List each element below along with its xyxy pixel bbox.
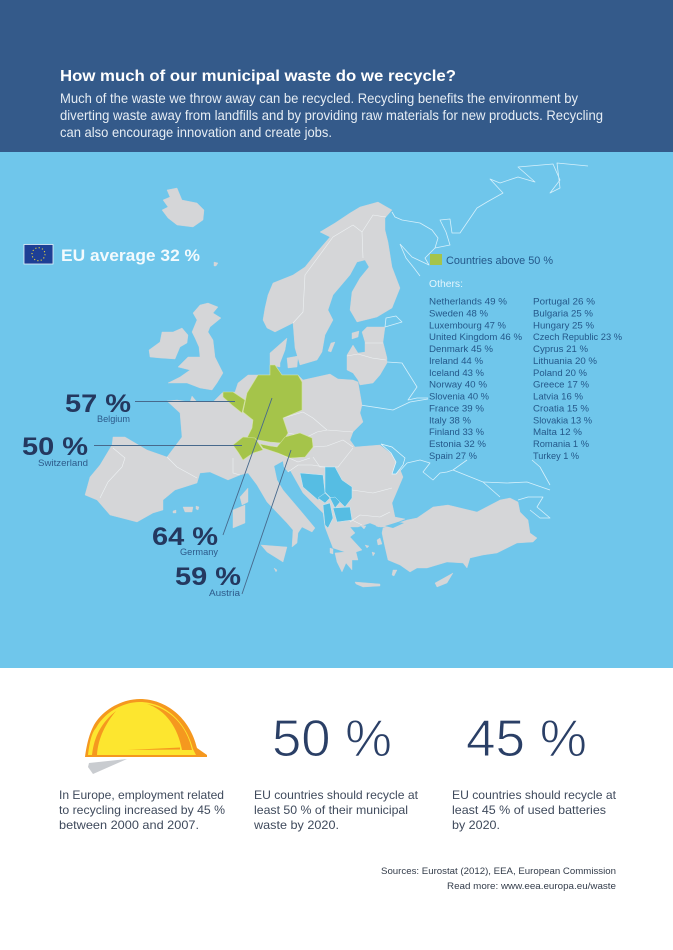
others list: column 2: Lithuania 20 %	[533, 356, 597, 367]
continental Europe	[85, 365, 405, 572]
callout: Austria: Austria	[209, 588, 241, 599]
Switzerland	[233, 437, 263, 460]
others list: column 2	[533, 296, 622, 462]
Belgium	[223, 392, 245, 413]
text block: employment: between 2000 and 2007.	[59, 818, 199, 832]
others list: column 1: Norway 40 %	[429, 380, 487, 391]
callout: Germany: 64 %	[152, 523, 218, 551]
others list: column 1: Sweden 48 %	[429, 308, 488, 319]
others list: column 2: Greece 17 %	[533, 380, 589, 391]
Iceland	[162, 188, 204, 227]
intro text: Much of the waste we throw away can be recycled. Recycling benefits the environment by	[60, 90, 578, 106]
sources	[381, 866, 616, 892]
sources: Read more: www.eea.europa.eu/waste	[447, 881, 616, 892]
others heading: Others:	[429, 279, 463, 290]
light-blue non-data Balkan countries	[300, 467, 352, 528]
stat: 50 %: 50 %	[272, 710, 392, 768]
Scandinavia	[263, 202, 400, 365]
others list: column 2: Czech Republic 23 %	[533, 332, 622, 343]
text block: municipal waste target	[253, 788, 419, 832]
others list: column 1: United Kingdom 46 %	[429, 332, 522, 343]
text block: municipal waste target: least 50 % of their municipal	[254, 803, 408, 817]
others list: column 2: Malta 12 %	[533, 427, 582, 438]
Great Britain	[168, 303, 223, 390]
text block: employment	[59, 788, 225, 832]
outlines of non-data eastern countries	[360, 163, 588, 518]
others list: column 1	[429, 296, 522, 462]
others list: column 2: Bulgaria 25 %	[533, 308, 593, 319]
Baltic islands	[328, 342, 335, 352]
text block: employment: In Europe, employment related	[59, 788, 224, 802]
others list: column 1: Spain 27 %	[429, 451, 477, 462]
intro text: can also encourage innovation and create jobs.	[60, 124, 332, 140]
others list: column 2: Cyprus 21 %	[533, 344, 588, 355]
sources: Sources: Eurostat (2012), EEA, European Commission	[381, 866, 616, 877]
EU flag icon	[24, 244, 53, 264]
Ireland	[149, 328, 188, 359]
Denmark	[270, 338, 298, 368]
others list: column 2: Turkey 1 %	[533, 451, 579, 462]
text block: employment: to recycling increased by 45 %	[59, 803, 225, 817]
others list: column 2: Latvia 16 %	[533, 392, 583, 402]
callout: Belgium	[65, 390, 235, 425]
others list: column 1: Italy 38 %	[429, 415, 471, 426]
Sea of Marmara	[385, 522, 404, 528]
Anatolia	[382, 498, 537, 572]
others list: column 1: Denmark 45 %	[429, 344, 493, 355]
stat: 45 %: 45 %	[466, 710, 587, 768]
text block: municipal waste target: EU countries should recycle at	[254, 788, 419, 802]
callout: Austria	[175, 450, 291, 599]
intro text	[60, 90, 603, 140]
Baltic states	[347, 327, 387, 385]
EU average label: EU average 32 %	[61, 246, 200, 265]
others list: column 1: Finland 33 %	[429, 427, 484, 438]
header panel	[0, 0, 673, 152]
callout: Belgium: Belgium	[97, 414, 130, 425]
others list: column 1: Luxembourg 47 %	[429, 320, 506, 331]
text block: batteries target	[452, 788, 617, 832]
Austria	[260, 433, 313, 458]
map panel: Europe	[0, 152, 673, 668]
others list: column 1: Slovenia 40 %	[429, 392, 489, 402]
text block: municipal waste target: waste by 2020.	[253, 818, 339, 832]
Moldova	[381, 444, 405, 474]
others list: column 1: France 39 %	[429, 403, 484, 414]
callout: Belgium: 57 %	[65, 390, 131, 418]
others list: column 2: Portugal 26 %	[533, 296, 595, 308]
national borders	[100, 412, 392, 525]
callout: Germany: Germany	[180, 547, 218, 558]
others list: column 2: Croatia 15 %	[533, 403, 589, 414]
others list: column 1: Estonia 32 %	[429, 439, 486, 450]
others list: column 2: Hungary 25 %	[533, 320, 594, 331]
others list: column 2: Poland 20 %	[533, 368, 587, 379]
text block: batteries target: EU countries should recycle at	[452, 788, 617, 802]
callout: Austria: 59 %	[175, 563, 241, 591]
text block: batteries target: least 45 % of used batteries	[452, 803, 606, 817]
icon: hard hat	[85, 699, 207, 774]
callout: Switzerland: 50 %	[22, 433, 88, 461]
text block: batteries target: by 2020.	[452, 818, 500, 832]
legend: countries above 50 %: Countries above 50 %	[446, 255, 553, 267]
others list: column 2: Slovakia 13 %	[533, 415, 592, 426]
Mediterranean islands	[173, 488, 453, 587]
title: How much of our municipal waste do we recycle?	[60, 68, 456, 85]
callout: Germany	[152, 398, 272, 558]
others list: column 1: Ireland 44 %	[429, 356, 483, 367]
intro text: diverting waste away from landfills and by providing raw materials for new products. Recycling	[60, 107, 603, 123]
callout: Switzerland	[22, 433, 242, 469]
others list: column 1: Netherlands 49 %	[429, 296, 507, 308]
others list: column 2: Romania 1 %	[533, 439, 589, 450]
callout: Switzerland: Switzerland	[38, 458, 88, 469]
others list: column 1: Iceland 43 %	[429, 368, 484, 379]
Germany	[243, 365, 302, 443]
